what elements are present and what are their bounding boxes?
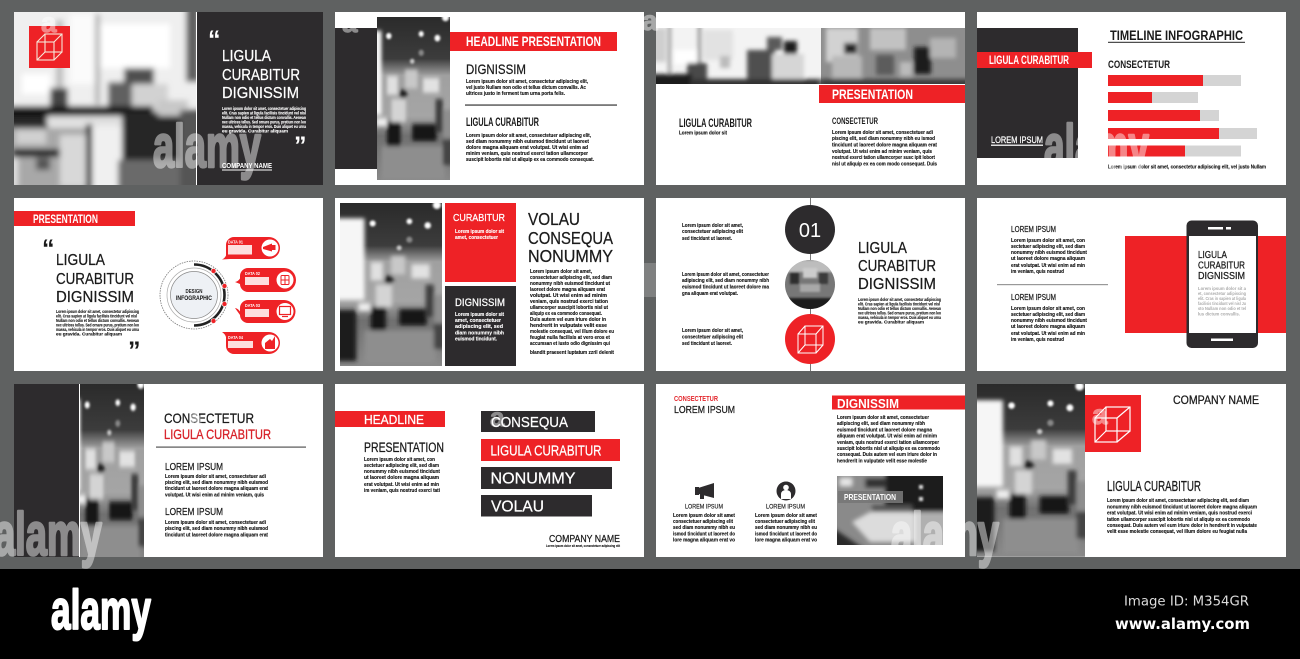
text: bottom note: consectetuer adipiscing elit bbox=[682, 334, 743, 340]
column: person text: LOREM IPSUM bbox=[766, 504, 805, 510]
text: middle note: euismod tincidunt ut laoreet dolore ma bbox=[682, 284, 770, 290]
column: person text bbox=[755, 504, 818, 544]
body text: laoreet dolore magna aliquam erat bbox=[530, 287, 605, 293]
heading: dignissim: DIGNISSIM bbox=[466, 61, 526, 77]
icon: megaphone bbox=[695, 483, 714, 499]
body text: ut laoreet dolore magna aliquam bbox=[1011, 256, 1085, 262]
body text: aliquam erat volutpat. Ut wisi enim ad minim bbox=[837, 434, 937, 440]
panel: dark dignissim bbox=[445, 286, 516, 366]
body text: ut laoreet dolore magna aliquam bbox=[364, 475, 439, 481]
title: CONSEQUA bbox=[528, 228, 613, 248]
body text: erat volutpat. Ut wisi enim ad min bbox=[1011, 331, 1085, 337]
body text: accumsan et iusto odio dignissim qui bbox=[530, 341, 610, 347]
body text: Lorem ipsum dolor sit amet, consectetuer adi bbox=[165, 474, 266, 480]
heading: presentation: PRESENTATION bbox=[364, 440, 444, 455]
red banner: LIGULA CURABITUR bbox=[989, 55, 1069, 67]
red banner bbox=[335, 411, 445, 427]
heading: lorem ipsum 1: LOREM IPSUM bbox=[165, 462, 223, 473]
dark block bbox=[977, 28, 1078, 158]
body text: elit. Cras sapien at ligula facilisis tincidunt vel nisl bbox=[858, 302, 940, 306]
heading: ligula curabitur: LIGULA CURABITUR bbox=[1107, 478, 1201, 495]
body text: piscing elit, sed diam nonummy nibh euismod bbox=[165, 526, 268, 532]
slide 12: company name bbox=[971, 382, 1286, 557]
body text bbox=[832, 130, 937, 168]
circle: red cube bbox=[785, 314, 835, 364]
body text: consectetuer adipiscing elit, sed diam bbox=[530, 275, 612, 281]
body text: hendrerit in vulputate velit esse bbox=[530, 323, 607, 329]
body text: tation ullamcorper suscipit lobortis nisl ut aliquip ex ea commodo bbox=[1107, 517, 1251, 523]
column: megaphone text: Lorem ipsum dolor sit amet bbox=[673, 513, 735, 519]
slide 5: design infographic bbox=[14, 198, 323, 371]
photo band bbox=[656, 28, 965, 84]
body text: vel justo Nullam non odio et tellus dictum convallis. Ac bbox=[466, 85, 586, 91]
body text: Lorem ipsum dolor sit amet, consectetuer adi bbox=[832, 130, 933, 136]
bar chart bbox=[1108, 75, 1257, 156]
column: megaphone text: lore magna aliquam erat vo bbox=[673, 538, 736, 544]
body text: eu gravida. Curabitur aliquam bbox=[858, 320, 924, 324]
callout: data 02: DATA 02 bbox=[245, 271, 260, 276]
watermark overlays: alamy bbox=[891, 501, 999, 568]
bar: ligula curabitur: LIGULA CURABITUR bbox=[490, 442, 602, 460]
panel: dark dignissim: Lorem ipsum dolor sit bbox=[455, 312, 504, 318]
body text bbox=[530, 269, 614, 356]
body text: Lorem ipsum dolor sit amet, bbox=[530, 269, 592, 275]
body text: elit. Cras sapien at ligula facilisis tincidunt vel nisl bbox=[56, 314, 137, 318]
body text: blandit praesent luptatum zzril delenit bbox=[530, 350, 614, 356]
red banner: PRESENTATION bbox=[832, 86, 913, 102]
heading: consectetur: CONSECTETUR bbox=[832, 116, 878, 127]
icon: red cube tile bbox=[29, 26, 70, 68]
body text: Lorem ipsum dolor sit amet, consectetuer adi bbox=[165, 520, 266, 526]
watermark overlays: alamy bbox=[1044, 113, 1149, 180]
body text: Nullam non odio et tellus dictum convallis. Aenean bbox=[56, 318, 139, 323]
quote mark close: ” bbox=[128, 337, 140, 365]
red headline banner: HEADLINE PRESENTATION bbox=[466, 33, 601, 49]
logo: alamy: alamy bbox=[51, 578, 151, 641]
circular diagram: DESIGN bbox=[186, 289, 203, 295]
body text: massa, vehicula in tempor eros. Duis aliquet eu urna bbox=[56, 327, 139, 332]
body text bbox=[1107, 498, 1257, 535]
body text: ullamcorper suscipit lobortis nisl ut bbox=[530, 305, 608, 311]
bar: nonummy bbox=[481, 467, 612, 489]
bar: nonummy: NONUMMY bbox=[490, 470, 576, 488]
icon: phone: elit. Cras in sapien at ligula bbox=[1198, 296, 1246, 301]
body text: ultrices justo in ferment tum urna porta felis. bbox=[466, 91, 565, 97]
heading: lorem ipsum 1: LOREM IPSUM bbox=[1011, 224, 1056, 234]
bar: ligula curabitur bbox=[481, 439, 620, 461]
callout: data 02 bbox=[235, 268, 296, 292]
body text: nec ultrices tellus. Sed ornare purus, pretium non leo bbox=[56, 322, 139, 328]
body text bbox=[1011, 306, 1087, 343]
heading: lorem ipsum: LOREM IPSUM bbox=[674, 404, 735, 416]
circle: 01: 01 bbox=[799, 220, 821, 242]
body text: massa, vehicula in tempor eros. Duis aliquet eu urna bbox=[222, 124, 306, 129]
bar: volau: VOLAU bbox=[491, 498, 544, 516]
dark block bbox=[335, 28, 377, 169]
body text bbox=[466, 79, 588, 97]
title: DIGNISSIM bbox=[858, 276, 936, 293]
heading: lorem ipsum 2: LOREM IPSUM bbox=[1011, 292, 1056, 302]
slide 10: list of bars bbox=[335, 384, 644, 557]
text: top note: Lorem ipsum dolor sit amet, bbox=[682, 223, 743, 229]
body text: erat volutpat. Ut wisi enim ad min bbox=[1011, 263, 1085, 269]
column: megaphone text bbox=[673, 504, 736, 544]
body text: dolore magna aliquam erat volutpat. Ut wisi enim ad bbox=[466, 145, 588, 151]
red banner: DIGNISSIM bbox=[837, 396, 899, 411]
body text: nonummy nibh euismod tincidunt bbox=[364, 469, 440, 475]
body text: hendrerit in vulputate velit esse molestie bbox=[837, 458, 927, 464]
heading: LIGULA CURABITUR bbox=[164, 426, 271, 442]
body text: Duis autem vel eum iriure dolor in bbox=[530, 317, 606, 323]
icon: red cube tile bbox=[1085, 395, 1141, 452]
quote mark close: ” bbox=[294, 132, 306, 160]
red band bbox=[1125, 236, 1286, 333]
icon: phone: lus dictum convallis. bbox=[1198, 312, 1240, 316]
body text: Lorem ipsum dolor sit amet, consectetuer adipiscing bbox=[222, 106, 306, 111]
text: bottom note bbox=[682, 328, 743, 347]
red banner: HEADLINE bbox=[364, 413, 424, 427]
photo bbox=[340, 203, 442, 366]
body text: feugiat nulla facilisis at vero eros et bbox=[530, 335, 610, 341]
quote mark open: “ bbox=[42, 235, 54, 263]
title: VOLAU bbox=[528, 209, 580, 229]
watermark overlays: a bbox=[342, 7, 358, 38]
column: person text: ismod tincidunt ut laoreet do bbox=[755, 532, 818, 538]
title: TIMELINE INFOGRAPHIC bbox=[1110, 28, 1243, 43]
body text: erat volutpat. Ut wisi enim ad minim veniam, quis nostrud exerci bbox=[1107, 510, 1252, 516]
body text: eu gravida. Curabitur aliquam bbox=[56, 332, 122, 336]
body text bbox=[165, 474, 268, 498]
body text: nonummy nibh euismod tincidunt bbox=[1011, 250, 1087, 256]
callout: data 01: DATA 01 bbox=[228, 240, 243, 244]
red banner: PRESENTATION bbox=[33, 214, 98, 226]
body text: aliquip ex ea commodo consequat. bbox=[530, 311, 602, 317]
photo bbox=[977, 384, 1085, 557]
circle: 01 bbox=[785, 205, 835, 254]
body text: molestie consequat, vel illum dolore eu bbox=[530, 329, 614, 335]
callout: data 01 bbox=[222, 237, 280, 260]
text: middle note: Lorem ipsum dolor sit amet, consectetuer bbox=[682, 272, 770, 278]
body text: consequat. Duis autem vel eum iriure dolor in hendrerit in vulputate bbox=[1107, 523, 1257, 529]
slide 9: consectetur split bbox=[14, 380, 323, 566]
text: bottom note: sed tincidunt ut laoreet. bbox=[682, 341, 732, 347]
slide 11: dignissim with icons bbox=[656, 384, 965, 557]
watermark overlays: alamy bbox=[153, 113, 261, 180]
icon: phone: CURABITUR bbox=[1198, 260, 1245, 272]
title: CURABITUR bbox=[222, 67, 300, 84]
title bbox=[858, 240, 936, 293]
body text: Lorem ipsum dolor sit amet, con bbox=[1011, 306, 1085, 312]
dark column bbox=[14, 384, 79, 557]
body text: piscing elit, sed diam nonummy nibh euismod bbox=[165, 480, 268, 486]
title: DIGNISSIM bbox=[56, 289, 134, 306]
panel: dark dignissim: DIGNISSIM bbox=[455, 297, 505, 309]
body text: volutpat. Ut wisi enim ad minim veniam, quis bbox=[165, 492, 264, 498]
panel: red curabitur: amet, consectetuer bbox=[455, 235, 499, 241]
icon: person bbox=[776, 482, 796, 500]
body text bbox=[364, 457, 440, 494]
body text: eu gravida. Curabitur aliquam bbox=[222, 128, 288, 134]
red banner bbox=[14, 211, 135, 226]
slide 3: presentation banner bbox=[650, 12, 971, 185]
icon: phone bbox=[1186, 220, 1258, 348]
column: person text: consectetuer adipiscing elit bbox=[755, 519, 815, 525]
lorem ipsum label: LOREM IPSUM bbox=[991, 135, 1043, 146]
title: NONUMMY bbox=[528, 246, 613, 266]
body text: veniam, quis nostrud exerci tation bbox=[530, 299, 608, 305]
body text: Lorem ipsum dolor sit amet, consectetuer bbox=[837, 415, 930, 421]
body text: ut laoreet dolore magna aliquam bbox=[1011, 324, 1085, 330]
body text: tincidunt ut laoreet dolore magna aliquam erat bbox=[832, 142, 937, 148]
body text: Nullam non odio et tellus dictum convallis. Aenean bbox=[222, 115, 306, 120]
body text: nonummy nibh euismod tincidunt bbox=[1011, 318, 1087, 324]
slide 6: volau consequa bbox=[334, 198, 644, 371]
footer text: Lorem ipsum dolor sit amet, consectetur adipiscing elit, vel justo Nullam bbox=[1108, 164, 1266, 170]
title: CURABITUR bbox=[858, 258, 936, 275]
title: LIGULA bbox=[858, 240, 907, 257]
text: middle note: adipiscing elit, sed diam nonummy nibh bbox=[682, 278, 769, 284]
body text: sectetuer adipiscing elit, sed diam bbox=[1011, 244, 1085, 250]
body text: suscipit lobortis nisl ut aliquip ex ea commodo bbox=[837, 446, 941, 452]
label: consectetur: CONSECTETUR bbox=[674, 396, 718, 403]
body text: nonummy nibh euismod tincidunt ut bbox=[530, 281, 610, 287]
footer band bbox=[0, 569, 1300, 659]
circular diagram: INFOGRAPHIC bbox=[176, 296, 213, 302]
watermark overlays: a bbox=[642, 5, 658, 36]
body text: consequat. Duis autem vel eum iriure dolor in bbox=[837, 452, 937, 458]
bar: consequa bbox=[481, 411, 595, 432]
panel: dark dignissim: adipiscing elit, sed bbox=[455, 324, 503, 330]
body text: nisl ut aliquip ex ea com modo consequat. Duis bbox=[832, 162, 937, 168]
website: www.alamy.com bbox=[1115, 615, 1250, 633]
body text: im veniam, quis nostrud bbox=[1011, 337, 1064, 343]
panel: red curabitur: CURABITUR bbox=[453, 212, 505, 224]
body text bbox=[466, 133, 594, 163]
text: bottom note: Lorem ipsum dolor sit amet, bbox=[682, 328, 743, 334]
body text: nonummy nibh euismod tincidunt ut laoreet dolore magna aliquam bbox=[1107, 504, 1257, 510]
callout: data 04: DATA 04 bbox=[228, 335, 243, 340]
body text: massa, vehicula in tempor eros. Duis aliquet eu urna bbox=[858, 315, 941, 320]
column: megaphone text: LOREM IPSUM bbox=[685, 504, 723, 510]
photo with label: PRESENTATION bbox=[844, 492, 896, 502]
heading: lorem ipsum 2: LOREM IPSUM bbox=[165, 507, 223, 518]
body text: nostrud exerci tation ullamcorper susc ipit lobort bbox=[832, 155, 935, 161]
body text: Lorem ipsum dolor sit amet, con bbox=[1011, 238, 1085, 244]
body text: minim veniam, quis nostrud exerci tation ullamcorper bbox=[466, 151, 589, 157]
slide 8: phone mockup bbox=[977, 198, 1286, 371]
callout: data 03: DATA 03 bbox=[245, 303, 260, 308]
body text bbox=[1011, 238, 1087, 275]
column: megaphone text: ismod tincidunt ut laoreet do bbox=[673, 532, 736, 538]
callout: data 04 bbox=[222, 332, 280, 354]
body text: sectetuer adipiscing elit, sed diam bbox=[1011, 312, 1085, 318]
watermark overlays bbox=[0, 5, 1149, 568]
slide 4: timeline infographic bbox=[977, 12, 1286, 185]
body text: im veniam, quis nostrud exerci tati bbox=[364, 488, 440, 494]
image id: Image ID: M354GR bbox=[1124, 594, 1249, 610]
body text: veniam, quis nostrud exerci tation ullamcorper bbox=[837, 440, 940, 446]
body text bbox=[837, 415, 941, 464]
body text: euismod tincidunt ut laoreet dolore magna bbox=[837, 428, 933, 434]
body text bbox=[165, 520, 268, 538]
body text: Lorem ipsum dolor sit amet, consectetur adipiscing bbox=[858, 297, 941, 302]
body text: im veniam, quis nostrud bbox=[1011, 269, 1064, 275]
panel: dark dignissim: diam nonummy nibh bbox=[455, 330, 504, 336]
body text: nec ultrices tellus. Sed ornare purus, pretium non leo bbox=[222, 120, 306, 124]
body text: nec ultrices tellus. Sed ornare purus, pretium non leo bbox=[858, 310, 941, 316]
body text: volutpat. Ut wisi enim ad minim veniam, quis bbox=[832, 149, 932, 155]
text: middle note: gna aliquam erat volutpat. bbox=[682, 291, 738, 297]
body text: Lorem ipsum dolor sit amet, con bbox=[364, 457, 435, 463]
column: person text: Lorem ipsum dolor sit amet bbox=[755, 513, 817, 519]
column: person text: sed diam nonummy nibh eu bbox=[755, 525, 817, 531]
icon: phone: Lorem ipsum dolor sit a bbox=[1198, 286, 1246, 291]
red banner bbox=[819, 85, 965, 103]
photo bbox=[377, 17, 450, 180]
heading: ligula curabitur: LIGULA CURABITUR bbox=[679, 118, 752, 130]
body text bbox=[858, 297, 941, 324]
body text: erat volutpat. Ut wisi enim ad min bbox=[364, 482, 439, 488]
bar: consequa: CONSEQUA bbox=[491, 414, 568, 431]
body text: Nullam non odio et tellus dictum convallis. Aenean bbox=[858, 306, 941, 311]
title bbox=[56, 252, 134, 306]
company name: COMPANY NAME bbox=[549, 534, 620, 545]
title bbox=[528, 209, 613, 266]
slide 2: headline presentation bbox=[335, 12, 644, 185]
column: person text: lore magna aliquam erat vo bbox=[755, 538, 818, 544]
watermark overlays: a bbox=[41, 7, 57, 38]
body text: Lorem ipsum dolor sit amet, consectetuer adipiscing elit, sed diam bbox=[1107, 498, 1249, 504]
body text bbox=[56, 309, 139, 336]
company name: COMPANY NAME bbox=[1173, 393, 1259, 407]
red banner bbox=[977, 52, 1092, 68]
company name: COMPANY NAME bbox=[222, 163, 272, 170]
body text: sectetuer adipiscing elit, sed diam bbox=[364, 463, 439, 469]
heading: consectetur: CONSECTETUR bbox=[1108, 59, 1170, 71]
photo with label bbox=[837, 476, 943, 545]
body text: adipiscing elit, sed diam nonummy nibh bbox=[837, 421, 925, 427]
icon: phone: sto Nullam non odio et tel bbox=[1198, 306, 1246, 311]
text: middle note bbox=[682, 272, 770, 297]
red headline banner bbox=[450, 32, 617, 51]
text: top note: sed tincidunt ut laoreet. bbox=[682, 236, 732, 242]
column: megaphone text: sed diam nonummy nibh eu bbox=[673, 525, 735, 531]
body text: tincidunt ut laoreet dolore magna aliquam erat bbox=[165, 486, 268, 492]
watermark overlays: a bbox=[1092, 399, 1108, 430]
watermark overlays: a bbox=[490, 402, 505, 432]
text: top note: consectetuer adipiscing elit bbox=[682, 229, 743, 235]
body text: Lorem ipsum dolor sit amet, consectetur adipiscing elit, bbox=[466, 79, 588, 85]
title bbox=[222, 48, 300, 102]
icon: phone: facilisis tincidunt vel nisl Ju bbox=[1198, 301, 1246, 306]
body text: volutpat. Ut wisi enim ad minim bbox=[530, 293, 607, 299]
circle: photo bbox=[785, 260, 835, 312]
company name: Lorem ipsum dolor sit amet, consectetuer adipiscing elit bbox=[546, 544, 621, 548]
title: LIGULA bbox=[56, 252, 105, 269]
body text: suscipit lobortis nisl ut aliquip ex ea commodo consequat. bbox=[466, 157, 594, 163]
circular diagram bbox=[160, 261, 228, 329]
panel: red curabitur: Lorem ipsum dolor sit bbox=[455, 229, 504, 235]
body text: elit. Cras sapien at ligula facilisis tincidunt vel nisl bbox=[222, 110, 306, 116]
panel: red curabitur bbox=[445, 203, 516, 282]
slide 7: numbered circles bbox=[656, 198, 965, 371]
quote mark open: “ bbox=[208, 26, 220, 54]
column: megaphone text: consectetuer adipiscing elit bbox=[673, 519, 733, 525]
heading: CONSECTETUR bbox=[164, 410, 254, 426]
panel: dark dignissim: amet, consectetuer bbox=[455, 318, 502, 324]
icon: phone: DIGNISSIM bbox=[1198, 271, 1245, 282]
caption: Lorem ipsum dolor sit bbox=[679, 130, 727, 136]
company name bbox=[546, 534, 621, 548]
body text: sed diam nonummy nibh euismod tincidunt ut laoreet bbox=[466, 139, 589, 145]
text: top note bbox=[682, 223, 743, 242]
slide 1: quote with photo bbox=[14, 12, 323, 185]
photo bbox=[80, 384, 144, 557]
body text bbox=[222, 106, 306, 134]
bar: volau bbox=[481, 495, 592, 516]
body text: velit esse molestie consequat, vel illum dolore eu feugiat nulla bbox=[1107, 529, 1248, 535]
panel: dark text column bbox=[197, 12, 323, 185]
red banner bbox=[832, 396, 965, 411]
icon: phone: et, consectetur adipiscing bbox=[1198, 291, 1246, 296]
watermark overlays: a bbox=[190, 408, 202, 430]
watermark fragment between slides bbox=[644, 263, 656, 297]
body text: Lorem ipsum dolor sit amet, consectetur adipiscing bbox=[56, 309, 139, 314]
panel: dark dignissim: euismod tincidunt. bbox=[455, 336, 497, 342]
body text: tincidunt ut laoreet dolore magna aliquam erat bbox=[165, 532, 268, 538]
title: DIGNISSIM bbox=[222, 85, 299, 102]
callout: data 03 bbox=[235, 300, 296, 323]
title: LIGULA bbox=[222, 48, 271, 65]
icon: phone: LIGULA bbox=[1198, 250, 1227, 261]
body text: Lorem ipsum dolor sit amet, consectetuer adipiscing elit, bbox=[466, 133, 591, 139]
photo: blurred cafe bbox=[14, 12, 196, 185]
body text: piscing elit, sed diam nonummy nibh eu ismod bbox=[832, 136, 935, 142]
heading bbox=[164, 410, 271, 442]
heading: ligula curabitur: LIGULA CURABITUR bbox=[466, 115, 539, 129]
title: CURABITUR bbox=[56, 271, 134, 288]
